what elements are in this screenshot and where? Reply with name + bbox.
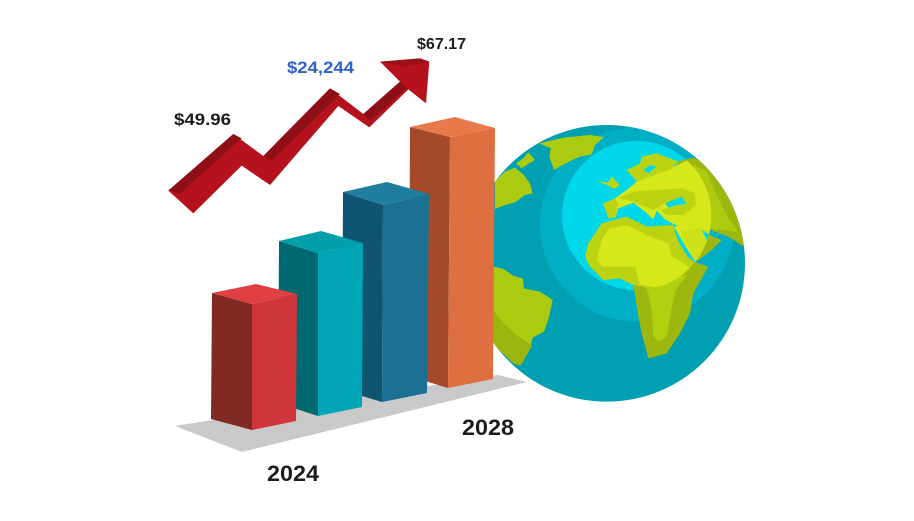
label: $24,244: $24,244 bbox=[287, 58, 355, 77]
sea: Black Sea bbox=[665, 197, 687, 208]
sea: Red Sea bbox=[674, 230, 693, 260]
label: $67.17: $67.17 bbox=[417, 36, 466, 53]
land: Iberia and west Europe shade bbox=[603, 198, 618, 218]
land: southern Europe shade bbox=[618, 188, 696, 215]
land: South America bbox=[490, 266, 553, 366]
bar: red bbox=[211, 284, 297, 430]
label: 2024: 2024 bbox=[267, 461, 320, 486]
bar: teal bbox=[278, 231, 363, 416]
label: 2028: 2028 bbox=[462, 415, 514, 440]
floor shadow bbox=[175, 375, 527, 452]
land: Africa bbox=[585, 217, 708, 358]
land: Eurasia lit bbox=[603, 160, 712, 262]
bar: orange bbox=[409, 117, 495, 388]
trend arrow bbox=[168, 58, 429, 213]
land: Asia outside lit circle bbox=[677, 158, 747, 248]
land: North America bbox=[495, 168, 533, 209]
land: Britain bbox=[597, 177, 620, 189]
label: $49.96: $49.96 bbox=[174, 110, 231, 129]
sea: Mediterranean bbox=[615, 203, 677, 227]
land: Africa lit bbox=[585, 216, 695, 288]
land: Greenland bbox=[539, 135, 604, 170]
globe bbox=[493, 125, 745, 402]
infographic canvas bbox=[168, 38, 745, 481]
land: Scandinavia bbox=[627, 153, 678, 182]
bar: blue bbox=[342, 182, 429, 402]
land: Arabia lit bbox=[680, 228, 710, 260]
land: Sahara bbox=[597, 225, 693, 288]
